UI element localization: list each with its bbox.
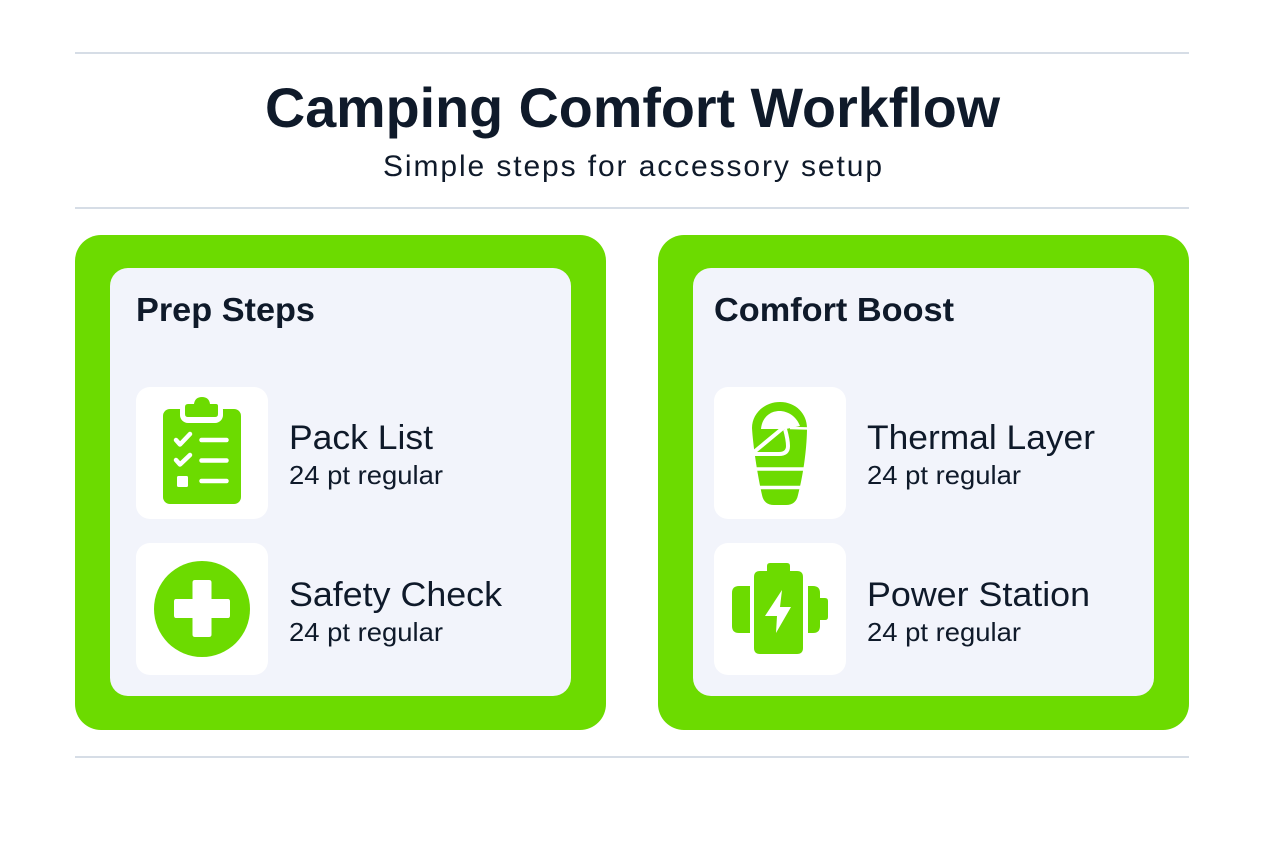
panel heading: prep steps: Prep Steps [136,291,315,328]
icon: battery with bolt [732,563,828,654]
item: thermal layer [714,387,1095,519]
label: thermal layer: Thermal Layer [867,419,1095,457]
item: safety check [136,543,503,675]
panel: comfort boost [658,235,1189,730]
label: power station: Power Station [867,576,1090,614]
icon: clipboard checklist [163,397,241,504]
item: power station [714,543,1090,675]
item: pack list [136,387,443,519]
title: Camping Comfort Workflow [265,76,1000,139]
panel heading: comfort boost: Comfort Boost [714,291,954,328]
icon: sleeping bag [750,402,810,505]
sublabel: pack list: 24 pt regular [289,460,443,490]
subtitle: Simple steps for accessory setup [383,150,882,183]
label: safety check: Safety Check [289,576,503,614]
sublabel: power station: 24 pt regular [867,617,1021,647]
sublabel: safety check: 24 pt regular [289,617,443,647]
icon: medical cross [154,561,250,657]
panel: prep steps [75,235,606,730]
label: pack list: Pack List [289,419,434,457]
sublabel: thermal layer: 24 pt regular [867,460,1021,490]
